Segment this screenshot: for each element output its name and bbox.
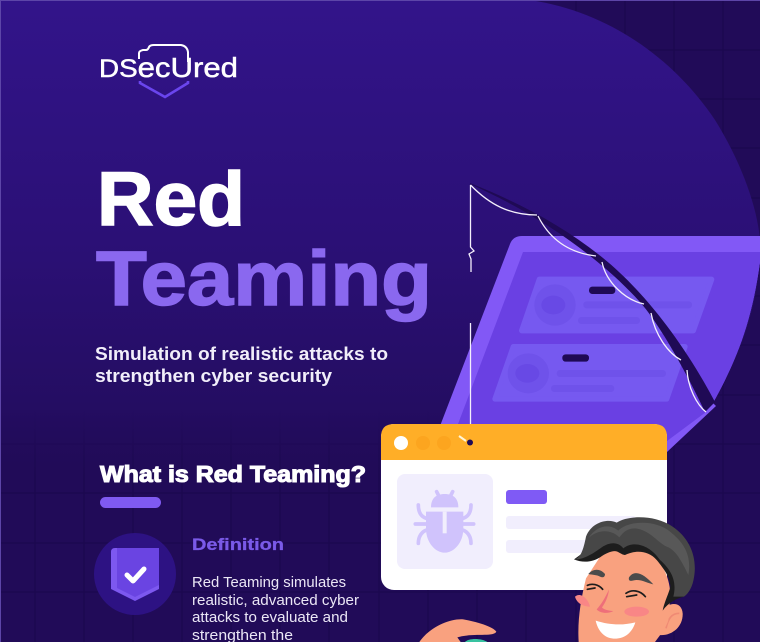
heading underline (100, 497, 161, 508)
title: Teaming (96, 236, 432, 322)
definition text: realistic, advanced cyber (192, 593, 359, 609)
window body (381, 424, 667, 590)
window dots (394, 436, 451, 450)
logo (99, 45, 238, 97)
laptop illustration (430, 236, 760, 452)
logo wordmark: DSecUred (99, 52, 238, 83)
hand (419, 619, 496, 642)
eyes (587, 584, 645, 597)
title: Red (97, 157, 245, 242)
browser window (381, 424, 667, 590)
laptop inner screen (450, 252, 760, 452)
logo shield outline (139, 45, 188, 62)
window header (381, 424, 667, 460)
white scallop line (469, 185, 706, 425)
person (574, 517, 695, 642)
eyebrows (588, 570, 653, 584)
logo shield chevron (140, 81, 188, 97)
subtitle: strengthen cyber security (95, 366, 332, 386)
definition heading: Definition (192, 535, 284, 554)
face (578, 547, 670, 642)
hook (459, 436, 473, 446)
title (96, 157, 432, 322)
mouth (596, 621, 635, 639)
icon: shield check (94, 533, 176, 615)
dark arc band (470, 183, 715, 412)
hair dark layer (574, 533, 687, 611)
definition text (192, 575, 359, 642)
definition text: attacks to evaluate and (192, 610, 348, 626)
window text lines (506, 490, 636, 553)
section heading: What is Red Teaming? (100, 461, 366, 487)
laptop outer lid (430, 236, 760, 452)
icon: bug (415, 492, 474, 553)
subtitle: Simulation of realistic attacks to (95, 344, 388, 364)
definition text: Red Teaming simulates (192, 575, 346, 591)
background blob (0, 0, 760, 480)
screen card 1 (522, 279, 712, 331)
nose (597, 589, 613, 613)
cheeks (575, 595, 649, 617)
subtitle (95, 344, 388, 386)
hair highlight (588, 523, 689, 575)
screen card 2 (495, 347, 685, 399)
bug panel (397, 474, 493, 569)
ear (658, 604, 683, 635)
curtain arc (469, 183, 715, 425)
hair main (574, 517, 695, 597)
